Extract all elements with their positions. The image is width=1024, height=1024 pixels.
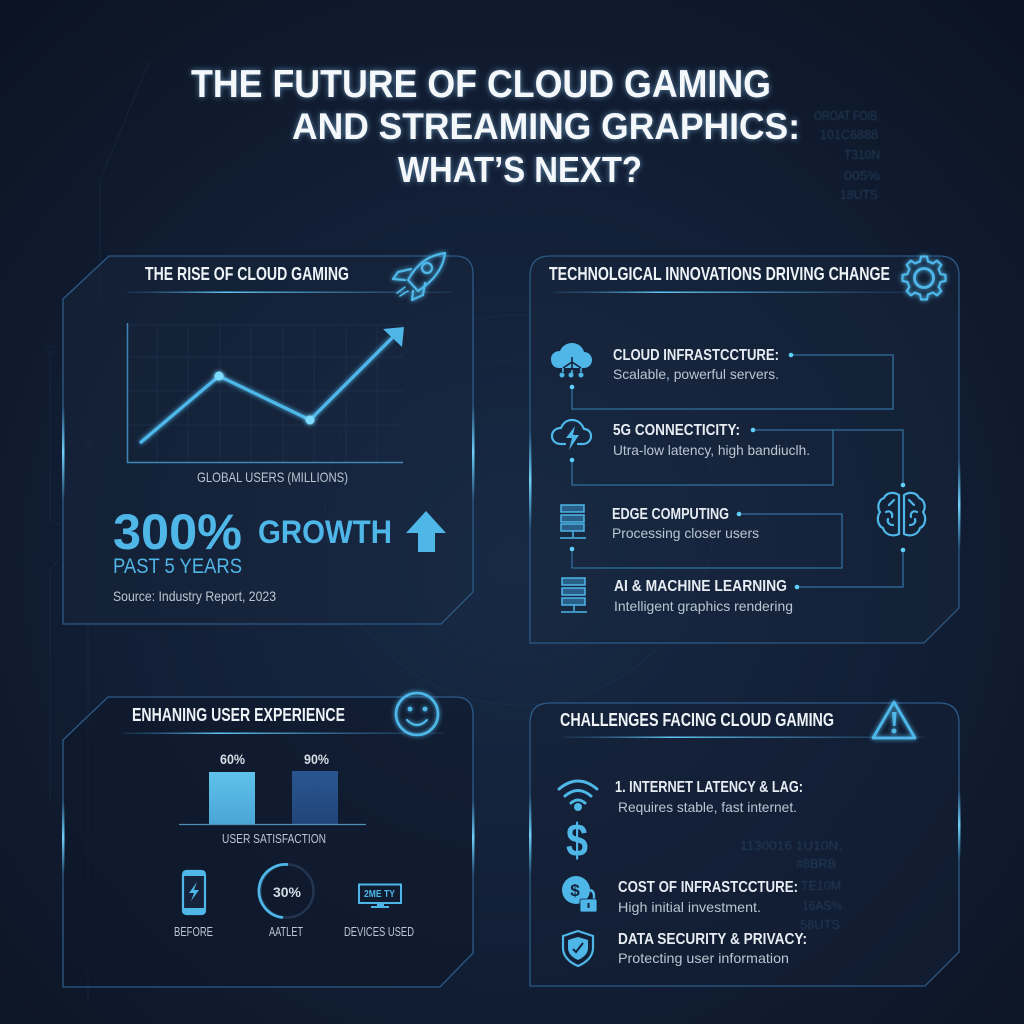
icon: coin and lock: $ [570, 881, 580, 900]
device labels: BEFORE [174, 925, 213, 939]
item: 5g connectivity [613, 422, 810, 458]
icon: smiley [396, 693, 438, 735]
panel heading: experience: ENHANING USER EXPERIENCE [132, 705, 345, 725]
bar chart: user satisfaction: 90% [304, 752, 329, 767]
icon: rocket [393, 253, 445, 300]
item: edge computing [612, 506, 759, 541]
background ghost data text, top right: 101C6888 [820, 127, 878, 142]
item: cloud infrastructure [613, 347, 779, 382]
ghost data text: 58UTS [800, 917, 840, 932]
item: data security [618, 931, 807, 966]
ghost data text: 16AS% [802, 898, 842, 913]
panel: enhancing user experience [62, 693, 474, 987]
source: Source: Industry Report, 2023 [113, 588, 276, 604]
item: cost: COST OF INFRASTCCTURE: [618, 879, 798, 896]
icon: up arrow [406, 511, 446, 552]
item: ai and machine learning: AI & MACHINE LEARNING [614, 578, 787, 595]
icon: gear [902, 256, 946, 300]
background circuit and ring decoration [46, 60, 715, 1000]
icon: shield [563, 931, 593, 966]
icon: warning triangle [873, 702, 915, 738]
device labels: DEVICES USED [344, 925, 414, 939]
stat: growth: GROWTH [258, 514, 392, 550]
item: cost [618, 879, 798, 915]
item: data security: DATA SECURITY & PRIVACY: [618, 931, 807, 948]
item: cloud infrastructure: CLOUD INFRASTCCTURE: [613, 347, 779, 364]
icon: cloud infrastructure [551, 343, 592, 378]
icon: wifi [559, 781, 597, 811]
background ghost data text, top right: 18UTS [840, 187, 878, 202]
stat caption: PAST 5 YEARS [113, 555, 242, 578]
icon: tv [359, 884, 401, 908]
bar chart: user satisfaction [179, 752, 366, 824]
ring gauge: 30%: 30% [273, 884, 302, 900]
icon: server two [561, 578, 587, 612]
panel heading: challenges: CHALLENGES FACING CLOUD GAMING [560, 710, 834, 730]
panel heading: innovations: TECHNOLGICAL INNOVATIONS DRIVING CHANGE [549, 264, 890, 284]
title: WHAT’S NEXT? [398, 149, 642, 190]
chart label: USER SATISFACTION [222, 832, 326, 846]
background ghost data text, top right: T310N [844, 147, 880, 162]
ghost data text: TE10M [801, 878, 841, 893]
title [191, 63, 800, 190]
icon: server one [560, 505, 586, 538]
item: ai and machine learning: Intelligent graphics rendering [614, 598, 793, 614]
icon: brain [878, 493, 925, 535]
ghost data text: 1130016 1U10N, [740, 838, 842, 853]
item: 5g connectivity: Utra-low latency, high bandiuclh. [613, 442, 810, 458]
ring gauge: 30% [259, 864, 314, 918]
ghost data text [740, 838, 842, 932]
line chart: global users [127, 323, 404, 462]
stat: 300%: 300% [113, 504, 242, 560]
item: internet latency: Requires stable, fast internet. [618, 799, 797, 815]
item: internet latency [615, 779, 803, 815]
item: data security: Protecting user information [618, 950, 789, 966]
item: 5g connectivity: 5G CONNECTICITY: [613, 422, 740, 439]
device labels [174, 925, 414, 939]
device labels: AATLET [269, 925, 303, 939]
bar chart: user satisfaction: 60% [220, 752, 245, 767]
ghost data text: #8BRB [796, 856, 836, 871]
panel: technological innovations [529, 256, 960, 643]
background ghost data text, top right [814, 108, 880, 202]
connector lines [570, 353, 905, 589]
icon: tv: 2ME TY [364, 889, 395, 900]
panel: challenges [529, 702, 960, 986]
item: cloud infrastructure: Scalable, powerful servers. [613, 366, 779, 382]
icon: coin and lock [562, 876, 597, 912]
title: THE FUTURE OF CLOUD GAMING [191, 63, 771, 106]
title: AND STREAMING GRAPHICS: [292, 106, 800, 147]
background ghost data text, top right: 005% [844, 168, 880, 183]
item: cost: High initial investment. [618, 899, 761, 915]
panel heading: rise: THE RISE OF CLOUD GAMING [145, 264, 349, 284]
item: edge computing: EDGE COMPUTING [612, 506, 729, 523]
icon: dollar sign: $ [566, 814, 588, 866]
icon: phone [183, 871, 205, 914]
item: internet latency: 1. INTERNET LATENCY & LAG: [615, 779, 803, 796]
background ghost data text, top right: OROAT FOIB, [814, 108, 880, 123]
icon: cloud with bolt [552, 420, 591, 450]
item: ai and machine learning [614, 578, 793, 614]
item: edge computing: Processing closer users [612, 525, 759, 541]
axis label: GLOBAL USERS (MILLIONS) [197, 469, 348, 485]
panel: the rise of cloud gaming [62, 253, 474, 624]
